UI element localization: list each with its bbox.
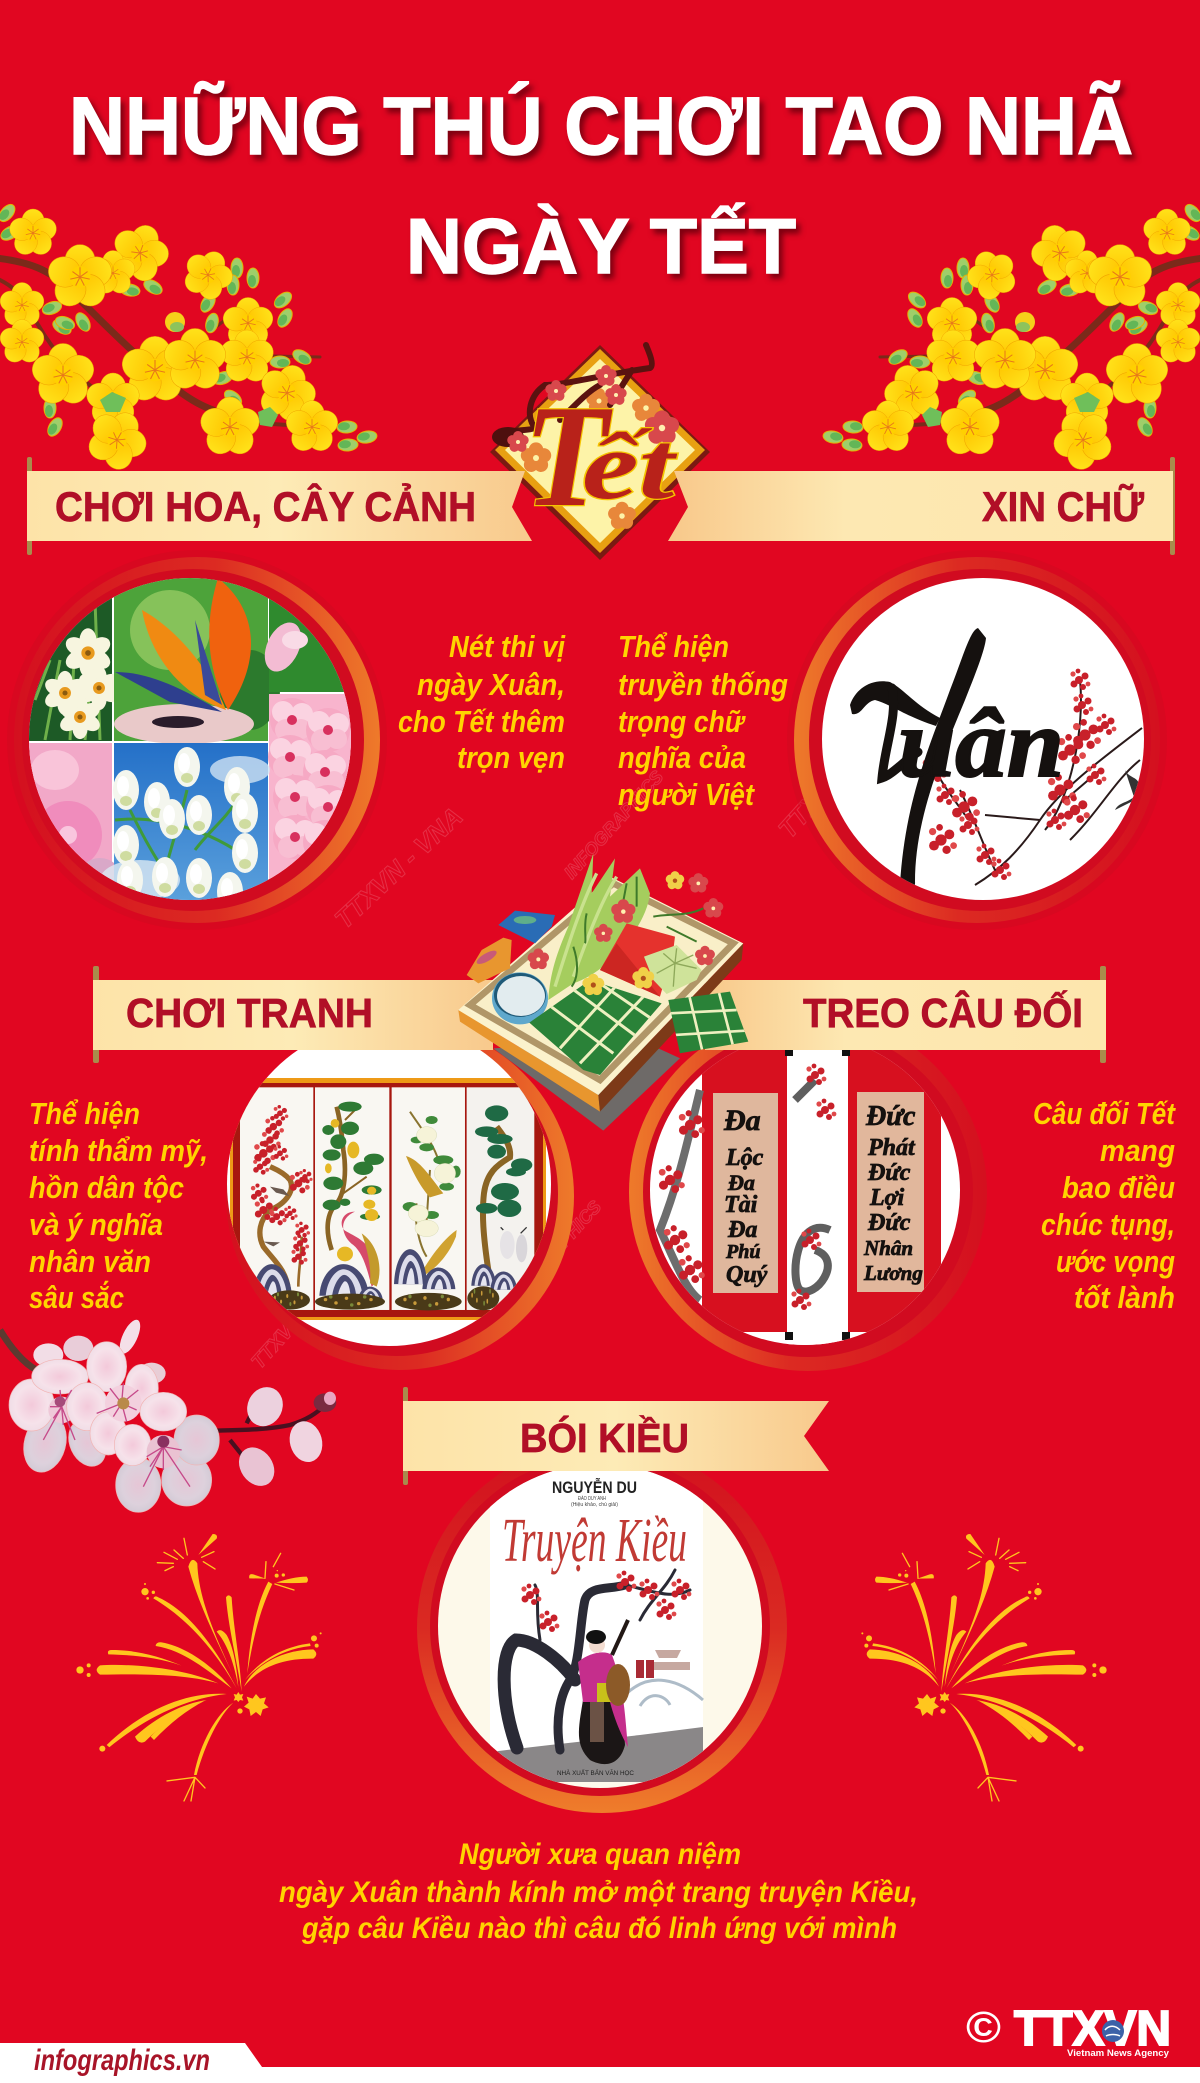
icon: firework right [861, 1534, 1107, 1801]
couplet right: Lợi [869, 1185, 905, 1211]
panel: couplets circle [629, 1049, 987, 1371]
apricot branch left [0, 201, 378, 484]
text: couplets description: tốt lành [1074, 1280, 1175, 1315]
book cover: Truyện Kiều [502, 1507, 687, 1575]
title: NGÀY TẾT [406, 202, 796, 290]
couplet left: Đa [727, 1170, 755, 1195]
apricot branch right [822, 201, 1200, 484]
banner: Boi Kieu rod [403, 1387, 408, 1485]
brush strokes of Xuan: uân [898, 690, 1064, 798]
stamens [43, 1383, 190, 1487]
text: calligraphy description: người Việt [618, 777, 755, 812]
banner: Xin chữ: XIN CHỮ [982, 482, 1144, 530]
couplet right: Đức [865, 1101, 916, 1132]
red box [600, 923, 675, 997]
banner: Boi Kieu ribbon: BÓI KIỀU [520, 1415, 689, 1461]
couplet right: Đức [867, 1160, 911, 1186]
panel: Xuan calligraphy circle [787, 550, 1167, 930]
text: calligraphy description: trọng chữ [618, 704, 746, 739]
text: couplets description: bao điều [1062, 1170, 1175, 1205]
couplet left: Quý [726, 1262, 768, 1288]
couplet right: Phát [867, 1135, 916, 1161]
large banh chung [529, 980, 662, 1075]
book cover [490, 1464, 703, 1782]
title [69, 81, 1133, 290]
photo cell: lily [264, 598, 344, 692]
couplet right [857, 1092, 924, 1292]
painting: green tree panel [315, 1102, 385, 1310]
text: flowers description [398, 629, 566, 775]
footer band with site name: infographics.vn [34, 2044, 210, 2077]
footer band with site name [0, 2043, 1200, 2083]
photo cell: white bells on blue sky [100, 743, 270, 912]
landscape [490, 1650, 703, 1782]
panel: flowers circle [7, 550, 387, 930]
photo cell: bird of paradise [114, 578, 280, 744]
text: calligraphy description: truyền thống [618, 667, 788, 702]
plum tree ink [504, 1570, 690, 1750]
ink plum on left [659, 1090, 705, 1300]
text: paintings description: tính thẩm mỹ, [29, 1133, 208, 1168]
lime cake [644, 945, 702, 994]
text: Kieu description: gặp câu Kiều nào thì câu đó linh ứng với mình [301, 1912, 897, 1945]
text: calligraphy description: nghĩa của [618, 740, 746, 775]
watermark texts: TTXVN [772, 760, 852, 844]
book cover: (Hiệu khảo, chú giải) [571, 1502, 618, 1508]
painting: blossoms and pheasant panel [394, 1112, 462, 1310]
center scroll [785, 1050, 850, 1345]
banner: Chơi tranh [93, 966, 493, 1063]
watermark texts [247, 760, 907, 1373]
icon: firework left [76, 1534, 322, 1801]
banner: Chơi tranh: CHƠI TRANH [126, 990, 373, 1036]
text: Tết logo letters [524, 375, 678, 537]
banner: Treo câu đối: TREO CÂU ĐỐI [803, 990, 1083, 1036]
text: flowers description: Nét thi vị [449, 629, 566, 664]
bloom A [9, 1359, 113, 1477]
text: flowers description: trọn vẹn [457, 740, 565, 775]
text: couplets description [1033, 1096, 1176, 1315]
painting: pine panel [467, 1105, 532, 1310]
watermark texts: TTXVN - VNA [329, 801, 468, 934]
couplet right: Đức [867, 1210, 911, 1236]
buds [33, 1317, 336, 1493]
couplet left: Tài [724, 1192, 758, 1218]
panel: paintings circle [225, 1020, 574, 1370]
text: paintings description: và ý nghĩa [29, 1207, 163, 1242]
bloom C [114, 1392, 219, 1512]
text: paintings description: Thể hiện [29, 1096, 140, 1131]
banner: Treo câu đối [705, 966, 1106, 1063]
couplet left: Lộc [725, 1145, 764, 1171]
logo: TTXVN: © [966, 2003, 1001, 2052]
text: calligraphy description: Thể hiện [618, 629, 729, 664]
text: flowers description: ngày Xuân, [417, 667, 565, 702]
book cover: NGUYỄN DU [552, 1478, 637, 1497]
brush strokes of Xuan [850, 628, 1064, 889]
couplet right: Lương [863, 1261, 923, 1285]
couplet right: Nhân [863, 1236, 913, 1260]
blue box [498, 911, 555, 943]
text: paintings description: nhân văn [29, 1244, 151, 1279]
icon: Tet diamond [490, 345, 710, 560]
text: couplets description: chúc tụng, [1041, 1207, 1175, 1242]
watermark texts: TTXVN [247, 1309, 308, 1373]
text: Kieu description: ngày Xuân thành kính mở một trang truyện Kiều, [279, 1876, 918, 1909]
bowl [492, 972, 548, 1024]
couplet left [713, 1093, 778, 1293]
small banh chung [668, 990, 748, 1055]
logo: TTXVN: TTXVN [1014, 2002, 1171, 2056]
text: paintings description: sâu sắc [29, 1279, 124, 1315]
text: Kieu description: Người xưa quan niệm [459, 1838, 741, 1871]
text: calligraphy description [618, 629, 788, 812]
plum branches [923, 669, 1142, 885]
watermark texts: INFOGRAPHICS [821, 1227, 907, 1357]
woman figure [578, 1620, 630, 1764]
book cover: ĐÀO DUY ANH [578, 1495, 606, 1502]
couplet left: Phú [725, 1241, 760, 1263]
couplet left: Đa [727, 1217, 757, 1243]
logo: TTXVN: Vietnam News Agency [1067, 2048, 1170, 2059]
photo cell: pink blossoms right [268, 694, 351, 880]
banner: Chơi hoa, cây cảnh [27, 457, 532, 555]
text: flowers description: cho Tết thêm [398, 704, 565, 739]
text: couplets description: Câu đối Tết [1033, 1096, 1176, 1131]
watermark texts: INFOGRAPHICS [560, 767, 667, 883]
panel: Kieu book circle [417, 1443, 787, 1813]
couplet left: Đa [723, 1104, 761, 1137]
text: paintings description [29, 1096, 208, 1315]
bloom B [67, 1342, 158, 1455]
painting: plum panel [251, 1105, 313, 1310]
banner: Boi Kieu ribbon [403, 1401, 829, 1471]
photo cell: pink flowers left [29, 743, 122, 885]
icon: tray of banh chung [458, 853, 748, 1131]
orange box [467, 938, 512, 983]
text: couplets description: ước vọng [1056, 1244, 1175, 1279]
book cover: NHÀ XUẤT BẢN VĂN HỌC [557, 1770, 635, 1777]
leaves [548, 853, 650, 1000]
text: couplets description: mang [1100, 1133, 1175, 1168]
text: Tết logo letters: T [524, 375, 613, 537]
flowers [581, 974, 606, 997]
text: paintings description: hồn dân tộc [29, 1170, 184, 1205]
banner: Xin chữ [668, 457, 1175, 555]
watermark texts: INFOGRAPHICS [498, 1197, 605, 1313]
text: Kieu description [279, 1838, 918, 1945]
banner: Chơi hoa, cây cảnh: CHƠI HOA, CÂY CẢNH [55, 482, 476, 530]
title: NHỮNG THÚ CHƠI TAO NHÃ [69, 81, 1133, 172]
text: Tết logo letters: ết [582, 412, 678, 519]
photo cell: narcissus [29, 598, 114, 741]
icon: peach blossom branch [0, 1317, 336, 1512]
